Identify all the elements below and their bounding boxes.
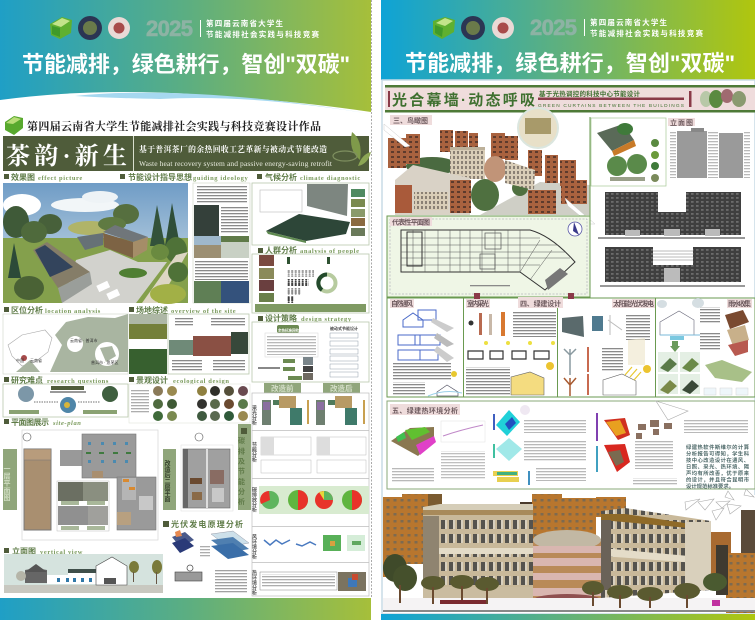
panel: climate diagnostic (252, 183, 369, 245)
heading: location analysis: location analysis (45, 308, 101, 315)
section label: typical floor plan (390, 217, 432, 226)
heading: elevation: 立面图 (12, 546, 36, 556)
conclusion text: 声均有所改善，优于原来 (686, 469, 750, 477)
panel: location map: 中国 (16, 357, 24, 363)
competition name (200, 18, 320, 39)
panel: people analysis (252, 254, 369, 313)
section label: elevation: 立面图 (670, 118, 693, 127)
year 2025: 2025 (146, 16, 193, 41)
panel: location map: 云南省 · 普洱市 (70, 337, 98, 343)
daylight plans (262, 396, 365, 425)
heading: ecological design (129, 375, 230, 385)
panel: performance analysis (387, 401, 755, 490)
section label: aerial view (390, 115, 432, 125)
indoor daylight: 室内采光 (467, 299, 489, 308)
section label: green building design: 四、绿建设计 (520, 299, 561, 308)
heading: overview of the site: overview of the site (171, 308, 236, 315)
second floor plan drawing (181, 433, 233, 511)
heading: ecological design: 景观设计 (136, 375, 168, 385)
solar photovoltaic (562, 299, 655, 396)
panel: green building design row (387, 298, 755, 397)
heading: elevation (4, 546, 83, 556)
competition name: 节能减排社会实践与科技竞赛 (590, 28, 704, 38)
title band: 基于光热调控的科技中心节能设计 (539, 89, 640, 98)
building rendering (383, 494, 755, 613)
panel: analysis column: 采光分析 (251, 404, 257, 426)
heading: research questions: research questions (47, 378, 109, 385)
first floor plan drawing (22, 430, 158, 540)
title band: 基于普洱茶厂的余热回收工艺革新与被动式节能改造 (139, 144, 327, 154)
vertical label: first floor plan: 一层平面图 (3, 465, 10, 502)
panel: site photos (129, 314, 249, 374)
section label: elevation (668, 118, 695, 127)
panel: design strategy: 被动式节能设计 (330, 325, 358, 331)
drawing: building elevation one (598, 192, 745, 238)
data tables (392, 419, 748, 486)
heading: design strategy: 设计策略 (265, 313, 297, 323)
heading: design strategy (258, 313, 352, 323)
line chart (441, 421, 485, 442)
panel: ecological plant circles (129, 384, 250, 423)
title band: Waste heat recovery system and passive energy-saving retrofit (139, 159, 333, 168)
year 2025: 2025 (530, 15, 577, 40)
title band: GREEN CURTAINS BETWEEN THE BUILDINGS (538, 103, 684, 109)
panel: location map: 普洱市 · 思茅区 (91, 359, 119, 365)
conclusion text: 的设计，并且符合昆明市 (686, 476, 750, 484)
vertical label: second floor plan (163, 449, 176, 510)
conclusion text: 分析报告可得知，学生科 (686, 450, 750, 458)
label: after renovation: 改造后 (330, 383, 353, 393)
vertical label: second floor plan: 改造后二层平面 (163, 459, 170, 503)
heading: site plan: 平面图展示 (11, 418, 49, 427)
block icons (636, 420, 672, 439)
icon: navy emblem (461, 16, 485, 40)
heading: overview of the site: 场地综述 (136, 305, 168, 315)
section label: thermal analysis: 五、绿建热环境分析 (392, 406, 458, 415)
title band: 茶韵·新生 (6, 143, 127, 170)
heading: effect picture: 效果图 (11, 172, 35, 182)
panel: landscape details (591, 118, 666, 186)
heading: design strategy: design strategy (301, 316, 352, 323)
heading: guiding ideology (120, 172, 248, 182)
title band: 光合幕墙·动态呼吸 (392, 91, 535, 109)
conclusion text: 技中心改造设计在通风、 (686, 456, 749, 464)
panel: location map: 云南省 (30, 357, 42, 363)
rainwater collection: 雨水收集 (728, 299, 751, 308)
panel: guiding ideology column (193, 183, 250, 303)
panel: research questions (3, 384, 128, 417)
panel: left poster (0, 0, 371, 620)
label: after renovation (323, 383, 360, 393)
label: before renovation (264, 383, 301, 393)
indoor daylight (466, 299, 556, 395)
competition name: 第四届云南省大学生 (590, 17, 668, 27)
banner slogan: 节能减排，绿色耕行，智创"双碳" (22, 52, 350, 77)
rainwater collection (657, 298, 752, 395)
heading: effect picture: effect picture (38, 175, 83, 182)
wind charts (264, 535, 365, 551)
drawing: building elevation two (600, 247, 745, 286)
section label: aerial view: 三、鸟瞰图 (393, 116, 428, 125)
panel: design strategy: 余热标准回收 (278, 328, 299, 332)
icon: red emblem (108, 17, 130, 39)
heading: site plan: site-plan (52, 420, 82, 427)
heading: location analysis (4, 305, 101, 315)
bottom strip left (0, 598, 371, 620)
conclusion text: 设计规范标准要求。 (686, 482, 734, 490)
right top banner (381, 0, 755, 80)
heading: ecological design: ecological design (173, 378, 230, 385)
heading: climate diagnostic: 气候分析 (265, 172, 297, 182)
bottom strip right (381, 614, 755, 620)
panel: analysis column: 风环境分析 (251, 534, 257, 560)
3D site model (391, 427, 436, 456)
heading: site plan (4, 418, 82, 427)
panel: floor plan (387, 216, 590, 297)
heading: location analysis: 区位分析 (11, 305, 43, 315)
competition name: 第四届云南省大学生 (206, 18, 284, 28)
conclusion text: 日照、采光、热环境、隔 (686, 462, 750, 470)
decorative dashed separator (370, 0, 372, 598)
panel: analysis column (251, 393, 369, 596)
banner slogan: 节能减排，绿色耕行，智创"双碳" (405, 51, 735, 76)
vertical label: carbon and energy analysis: 碳排及节能分析 (238, 436, 245, 506)
heading: analysis of people: 人群分析 (265, 245, 297, 255)
icon: green cube logo (433, 17, 455, 39)
left top banner (0, 0, 371, 118)
natural ventilation (390, 299, 462, 396)
drawing: elevation (4, 554, 163, 593)
icon: navy emblem (78, 16, 102, 40)
vertical label: carbon and energy analysis (238, 424, 251, 510)
heading: analysis of people: analysis of people (300, 248, 360, 255)
poster body (382, 80, 755, 614)
heading: climate diagnostic: climate diagnostic (300, 175, 361, 182)
daylight bars (493, 471, 530, 485)
heading: guiding ideology: guiding ideology (193, 175, 248, 182)
section label: thermal analysis (390, 404, 460, 415)
heading: research questions (4, 375, 109, 385)
diagram: PV principle (172, 530, 249, 594)
hero rendering: effect picture (3, 183, 188, 304)
heading: climate diagnostic (257, 172, 361, 182)
heading: elevation: vertical view (40, 549, 83, 556)
competition name (584, 17, 704, 38)
heading: analysis of people (258, 245, 360, 255)
solar photovoltaic: 太阳能光伏发电 (613, 299, 654, 308)
panel: analysis column: 节能分析 (251, 441, 257, 463)
section label: green building design (474, 293, 574, 308)
aerial view section (384, 108, 595, 295)
work heading: 第四届云南省大学生节能减排社会实践与科技竞赛设计作品 (27, 119, 321, 133)
wind simulation maps (493, 405, 530, 461)
panel: location map (3, 314, 128, 374)
thermal simulation maps (596, 413, 630, 472)
thermal table and map (260, 572, 366, 591)
carbon pie charts (259, 486, 369, 514)
panel: right poster (381, 0, 755, 620)
conclusion text: 绿建热软件斯维尔的计算 (686, 443, 750, 451)
heading: PV analysis: 光伏发电原理分析 (171, 519, 243, 529)
label: before renovation: 改造前 (271, 383, 294, 393)
icon: birds and paper planes (656, 401, 754, 520)
heading: effect picture (4, 172, 83, 182)
title band (3, 132, 371, 171)
competition name: 节能减排社会实践与科技竞赛 (206, 29, 320, 39)
energy tables (261, 437, 366, 473)
icon: green cube logo (50, 17, 72, 39)
icon: red emblem (492, 17, 514, 39)
panel: analysis column: 热环境分析 (251, 569, 257, 596)
heading: guiding ideology: 节能设计指导思想 (128, 172, 192, 182)
title band (385, 85, 755, 112)
conclusion text (686, 443, 750, 490)
icon: small leaf cube (5, 116, 23, 135)
section label: typical floor plan: 代表性平面图 (392, 218, 430, 226)
panel: analysis column: 碳排放分析 (251, 486, 257, 513)
heading: overview of the site (129, 305, 236, 315)
natural ventilation: 自然通风 (391, 299, 413, 308)
panel: design strategy (252, 322, 369, 382)
heading: research questions: 研究难点 (11, 375, 43, 385)
drawing: small elevations (670, 128, 750, 178)
vertical label: first floor plan (3, 449, 17, 510)
